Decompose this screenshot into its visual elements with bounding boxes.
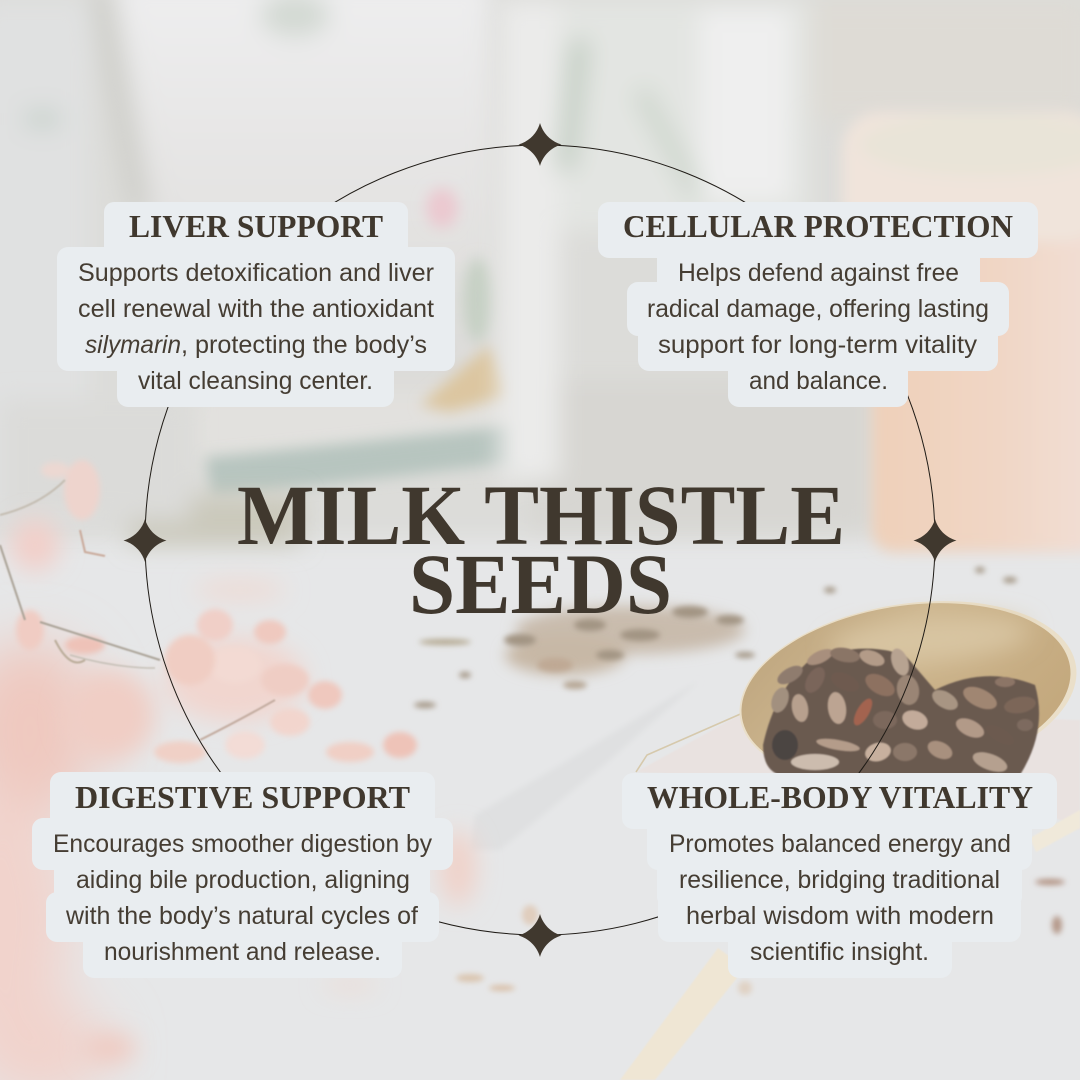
panel: digestive support (32, 772, 453, 978)
body: digestive support (53, 830, 432, 966)
panel: whole-body vitality (622, 773, 1057, 978)
bottle (6, 0, 492, 218)
body: cellular protection: support for long-term vitality (658, 331, 978, 359)
body: digestive support: aiding bile production, aligning (76, 866, 410, 894)
panel: cellular protection (598, 202, 1038, 407)
body: cellular protection: radical damage, offering lasting (647, 295, 989, 323)
flower stems (0, 480, 275, 740)
star ornament right (914, 519, 956, 562)
handle (620, 810, 1080, 1080)
table shadow (124, 492, 308, 555)
body: liver support: Supports detoxification and liver (78, 259, 434, 287)
body: whole-body vitality: herbal wisdom with modern (686, 902, 994, 930)
pink flowers (0, 460, 476, 1080)
body: liver support: silymarin (85, 331, 181, 359)
heading: digestive support: DIGESTIVE SUPPORT (75, 779, 410, 815)
star ornament left (124, 519, 166, 562)
body: cellular protection: and balance. (749, 367, 888, 395)
heading: cellular protection: CELLULAR PROTECTION (623, 208, 1013, 244)
body: digestive support: Encourages smoother digestion by (53, 830, 432, 858)
marble vein (470, 680, 700, 850)
body: liver support (78, 259, 434, 395)
body: whole-body vitality (669, 830, 1011, 966)
body: digestive support: with the body’s natural cycles of (65, 902, 418, 930)
pink cup (842, 112, 1080, 552)
body: digestive support: nourishment and release. (104, 938, 381, 966)
title: MILK THISTLE (237, 467, 845, 563)
background box top right (486, 0, 803, 484)
panel: liver support (57, 202, 455, 407)
body: cellular protection (647, 259, 989, 395)
star ornament bottom (518, 914, 562, 957)
heading: whole-body vitality: WHOLE-BODY VITALITY (647, 779, 1033, 815)
seeds in scoop (763, 646, 1039, 776)
body: liver support: , protecting the body’s (181, 331, 427, 359)
circle ring (145, 145, 935, 935)
heading: liver support: LIVER SUPPORT (129, 208, 383, 244)
body: liver support: vital cleansing center. (138, 367, 373, 395)
body: whole-body vitality: Promotes balanced energy and (669, 830, 1011, 858)
scattered seeds (414, 567, 1065, 995)
title (237, 467, 845, 632)
star ornament top (518, 123, 562, 166)
body: liver support: cell renewal with the antioxidant (78, 295, 434, 323)
body: whole-body vitality: scientific insight. (750, 938, 929, 966)
body: whole-body vitality: resilience, bridging traditional (679, 866, 1000, 894)
title: SEEDS (409, 536, 672, 632)
body: cellular protection: Helps defend against free (678, 259, 959, 287)
tray (636, 714, 740, 772)
gold scoop (740, 601, 1076, 773)
